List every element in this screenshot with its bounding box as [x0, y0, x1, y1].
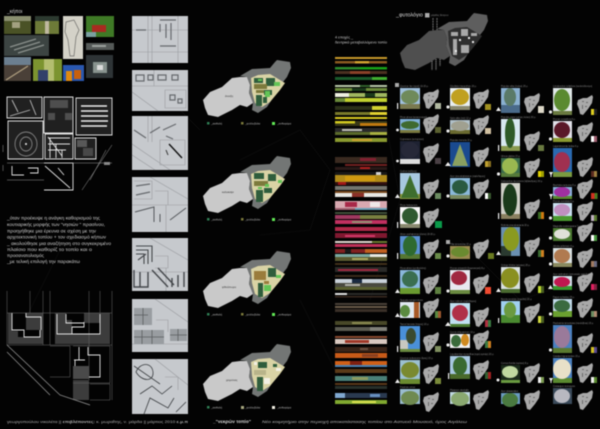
tree card: Acer pseudoplatanus (σφένδαμος) [450, 175, 485, 178]
label: άνοιξη [225, 94, 233, 98]
tree card [549, 85, 597, 115]
tree card: Abies cephalonica (έλατο) 20-30 μ. [400, 233, 436, 236]
tree card [549, 118, 597, 142]
tree card [448, 353, 494, 380]
legend: _ανθοφόρα [276, 406, 292, 410]
legend keys: catalogue: μέγεθος δέντρων [431, 14, 449, 17]
text block: design explanation: _με τελική επιλογή την παρακάτω [6, 259, 81, 264]
legend keys: catalogue: είδη φύτευσης [431, 36, 446, 39]
legend [207, 122, 292, 126]
text block: design explanation: προηγήθηκε μια έρευνα σε σχέση με την [7, 228, 97, 234]
title: gardens: _κήποι [6, 8, 22, 15]
tree card [395, 298, 441, 318]
tree card: Sequoia sempervirens [400, 299, 424, 302]
photo 8 [33, 59, 62, 81]
tree card [549, 322, 597, 353]
winter planting [254, 362, 281, 391]
tree card [396, 138, 441, 164]
tree card: Quercus ilex (αριά) 10-15 μ. [400, 85, 429, 88]
legend: _αειθαλή [210, 218, 223, 222]
text block: design explanation: _ ακολούθησε μια αναζήτηση στο συγκεκριμένο [6, 241, 112, 246]
photo 6 [86, 43, 114, 50]
legend: _φυλλοβόλα [244, 312, 261, 316]
tree card [549, 145, 597, 177]
tree card: Albizia julibrissin 8 μ. [553, 245, 575, 248]
tree card [397, 233, 441, 259]
legend [207, 218, 292, 222]
legend: _αειθαλή [210, 122, 223, 126]
tree card: Cercis siliquastrum 10 μ. [450, 331, 476, 334]
tree card: Ulmus glabra 15 μ. [501, 155, 521, 158]
tree card: Cornus florida (κράνια) 8 μ. [501, 362, 529, 365]
plan drawing: selected layout [7, 291, 112, 405]
tree card [548, 272, 597, 292]
tree card [549, 200, 597, 221]
photo 10 [86, 55, 113, 78]
tree card: Paulownia tomentosa (παυλόβνια) 15 μ. [553, 322, 594, 325]
tree card [445, 300, 491, 327]
tree card: Picea abies (ερυθρελάτη) [400, 267, 426, 270]
tree card: Salix alba (ιτιά) 12 μ. [450, 117, 472, 120]
tree card: Ginkgo biloba (γκίνγκο) 25 μ. [501, 264, 531, 267]
text block: design explanation [6, 216, 112, 264]
tree card [496, 225, 544, 257]
map: autumn [203, 251, 292, 316]
tree card: Cedrus (κέδρος) [400, 170, 417, 173]
legend: _αειθαλή [210, 312, 223, 316]
tree card: Liriodendron tulipifera (τουλιπόδεντρο) [553, 85, 592, 88]
map sketch 1 [132, 16, 188, 63]
photo 4: flower garden [86, 16, 114, 37]
tree catalogue: column 2 [445, 85, 494, 410]
legend: _φυλλοβόλα [244, 406, 261, 410]
tree card: Fagus sylvatica 25 μ. [553, 296, 575, 299]
tree card [446, 175, 491, 199]
tree card [549, 245, 597, 268]
tree card: Gleditsia triacanthos 15 μ. [450, 85, 477, 88]
tree card: Prunus pissardii (δαμασκηνιά) 8 μ. [450, 267, 485, 270]
tree card: Betula pendula (σημύδα) 20 μ. [501, 298, 533, 301]
panel: garden reference photos [4, 16, 114, 81]
seasonal colour strips: summer [335, 157, 387, 277]
footer: credits: γεωργοπούλου νικολέτα || επιβλέποντες: κ. μωραΐτης, ν. μάρδα || μάρτιος 2010 ε.μ.π [7, 420, 188, 424]
label: καλοκαίρι [222, 190, 234, 194]
heading: four seasons [335, 36, 387, 44]
tree card: Populus alba (λεύκα) 25 μ. [501, 85, 528, 88]
tree card [397, 323, 441, 352]
tree card: Fraxinus ornus [400, 386, 416, 389]
tree card: Pinus pinea (κουκουναριά) [400, 116, 427, 119]
heading: plant catalogue: _φυτολόγιο [395, 12, 423, 18]
tree card [397, 205, 442, 228]
tree card [446, 85, 491, 110]
tree card: Catalpa bignonioides 15 μ. [553, 355, 581, 358]
text block: design explanation: κουτιαρικής μορφής των "νησιών " πρασίνου, [7, 222, 105, 227]
photo 3: sketch plan [63, 16, 83, 59]
text block: design explanation: _όταν προέκυψε η ανάγκη καθορισμού της [6, 216, 100, 220]
tree card [498, 116, 544, 151]
tree card [549, 179, 598, 199]
photo 7 [4, 57, 31, 81]
tree card: Prunus serrulata 6 μ. [553, 200, 575, 203]
legend: _ανθοφόρα [276, 312, 292, 316]
tree catalogue: column 4 [548, 85, 598, 410]
tree card: Cupressus (κυπαρίσσι) [400, 138, 424, 141]
key squares [395, 83, 450, 244]
legend [207, 406, 292, 410]
tree card [400, 386, 439, 412]
legend: _φυλλοβόλα [244, 218, 261, 222]
heading: four seasons: δεντρικό μεταβαλλόμενο τοπίο [335, 40, 387, 44]
tree card: Quercus pubescens (δρυς) 15 μ. [400, 357, 434, 360]
map: summer [203, 156, 292, 222]
text block: design explanation: πλαίσιο που καθορίζ το τοπίο και ο [7, 247, 93, 252]
photo 9 [63, 65, 84, 81]
map: spring [203, 60, 292, 126]
tree card [497, 155, 544, 178]
map sketch 4 [132, 177, 188, 232]
photo 1 [4, 16, 31, 34]
photo 5: aerial [4, 35, 49, 56]
map sketch 2 [132, 70, 188, 111]
tree card [501, 390, 540, 410]
heading: four seasons: 4 εποχές _ [335, 36, 354, 40]
legend: _ανθοφόρα [276, 122, 292, 126]
legend: _αειθαλή [210, 406, 223, 410]
plan drawing: garden geometry [3, 97, 112, 190]
tree card: Platanus orientalis [450, 389, 470, 392]
footer: project title: _"νεκρών τοπίο" [212, 419, 251, 424]
map sketch 3 [132, 116, 188, 170]
spring planting [254, 78, 280, 106]
tree card [446, 330, 491, 350]
legend: _ανθοφόρα [276, 218, 292, 222]
tree card [395, 170, 441, 199]
tree catalogue: column 1 [395, 85, 442, 412]
tree card: Populus tremula 20 μ. [450, 139, 473, 142]
tree card: Acer platanoides [501, 390, 519, 393]
tree card: Magnolia soulangeana 7 μ. [553, 226, 581, 228]
tree card [395, 267, 441, 294]
tree card: Tilia tomentosa 15 μ. [450, 243, 472, 246]
tree card [553, 385, 593, 410]
map sketch 5 [132, 238, 188, 291]
tree card: Populus nigra (μαύρη λεύκα) 30 μ. [501, 116, 536, 119]
tree card [498, 180, 544, 219]
map sketch 6 [132, 299, 188, 352]
label: χειμώνας [226, 378, 238, 382]
map: winter [203, 344, 292, 410]
photo 2 [35, 16, 59, 34]
autumn planting [254, 268, 281, 297]
tree card: Pinus halepensis [400, 205, 418, 207]
summer planting [254, 173, 282, 202]
text block: design explanation: αρχιτεκτονική τοπίου + τον σχεδιασμό κήπων [7, 234, 107, 240]
tree card [549, 296, 597, 318]
tree card [549, 222, 597, 242]
map: planting distribution [400, 13, 488, 70]
tree card [446, 239, 494, 259]
tree card [397, 85, 441, 109]
tree card: Liquidambar styraciflua (υγρή αμπάρ) 20 μ. [450, 353, 494, 356]
tree card: Lagerstroemia indica 6 μ. [553, 145, 579, 148]
tree card [445, 139, 491, 167]
footer: project description: Νέο κοιμητήριο στην περιοχή αποκατάστασης τοπίου στο Αστυειό Μουσειό, όρος Αιγάλεω [262, 419, 467, 424]
tree card [498, 298, 544, 323]
tree card [496, 85, 544, 113]
map sketch 7 [132, 359, 188, 414]
tree card [396, 114, 441, 134]
tree card: Taxus baccata (ίταμος) 10 μ. [400, 323, 429, 326]
text block: design explanation: προσανατολισμός [7, 253, 44, 258]
seasonal colour strips: winter [335, 336, 387, 404]
tree card: Robinia pseudoacacia 20 μ. [501, 225, 530, 227]
tree card: Acer rubrum (σφένδαμος) [450, 300, 476, 303]
tree card [549, 355, 597, 383]
tree card [450, 389, 489, 410]
tree card [446, 267, 491, 294]
tree card [446, 115, 491, 135]
tree card: Bauhinia purpurea 5 μ. [553, 184, 577, 187]
label: φθινόπωρο [222, 285, 237, 289]
tree card: Calocedrus decurrens (λιβόκεδρος) 30 μ. [501, 180, 543, 183]
seasonal colour strips: autumn [335, 279, 387, 331]
seasonal colour strips: spring [335, 57, 387, 142]
tree card: Crataegus monogyna [553, 385, 576, 388]
tree catalogue: column 3 [496, 85, 544, 410]
tree card: Acer palmatum (ιαπωνικός σφένδαμος) [553, 273, 593, 276]
legend: _φυλλοβόλα [244, 122, 261, 126]
tree card [496, 264, 544, 293]
legend [207, 312, 292, 316]
tree card [395, 357, 441, 384]
tree card [496, 362, 544, 383]
tree card: Prunus cerasifera 8 μ. [553, 118, 576, 121]
legend keys: catalogue [425, 13, 449, 70]
